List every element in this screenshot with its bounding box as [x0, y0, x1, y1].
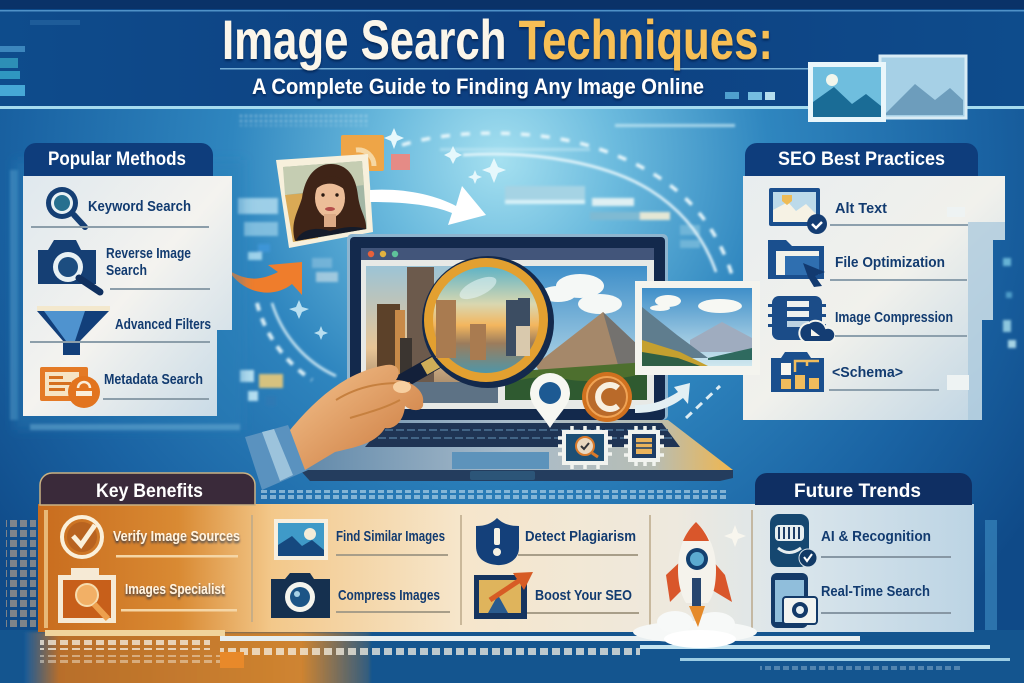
benefit: images specialist: [58, 568, 237, 623]
dividers: [252, 510, 752, 628]
practice: alt text: Alt Text: [835, 200, 887, 217]
benefit: images specialist: Images Specialist: [125, 581, 225, 598]
icon: memory chip: [624, 426, 664, 466]
practice: image compression: [768, 296, 967, 342]
method: keyword search: Keyword Search: [88, 198, 191, 215]
icon: location pin: [530, 373, 570, 428]
icon: copyright badge: [582, 372, 632, 422]
panel: popular methods: [14, 143, 244, 430]
method: metadata search: Metadata Search: [104, 371, 203, 388]
panel heading: future trends: [755, 473, 972, 505]
benefit: find similar images: [274, 519, 448, 560]
benefit: compress images: [271, 573, 450, 618]
panel: seo best practices: [743, 143, 1005, 420]
title band: [0, 0, 1024, 109]
method: keyword search: [31, 187, 209, 228]
screen image: mountain: [505, 266, 660, 400]
icon: search chip: [558, 426, 612, 469]
benefit: find similar images: Find Similar Images: [336, 528, 445, 545]
panel heading: popular methods: Popular Methods: [48, 149, 186, 170]
arrow: card to copyright: [635, 383, 720, 418]
panel heading: future trends: Future Trends: [794, 481, 921, 502]
sleeve: [245, 425, 308, 490]
benefit: detect plagiarism: [476, 518, 638, 565]
arrow: orange curved: [228, 262, 302, 295]
panel heading: seo best practices: SEO Best Practices: [778, 149, 945, 170]
photo of woman: [276, 154, 373, 248]
image card: landscape: [635, 281, 760, 375]
benefit: verify image sources: [62, 517, 240, 558]
title: Image Search Techniques:: [222, 8, 773, 71]
panel heading: seo best practices: [745, 143, 978, 176]
icon: rocket: [633, 522, 757, 648]
icon: pink tile: [391, 154, 410, 170]
panel heading: popular methods: [24, 143, 213, 176]
trend: real-time search: [771, 573, 951, 628]
panel heading: key benefits: Key Benefits: [96, 481, 203, 502]
laptop screen: [347, 234, 668, 420]
method: reverse image search: [38, 240, 210, 292]
icon: top-right image thumbnails: [808, 56, 966, 122]
practice: schema: [771, 352, 939, 392]
panel heading: key benefits: [40, 473, 255, 505]
panel: benefits and trends band: [6, 473, 1010, 670]
practice: schema: <Schema>: [832, 364, 903, 381]
practice: alt text: [769, 188, 968, 234]
method: advanced filters: [30, 306, 211, 355]
hand holding magnifier: [245, 256, 554, 490]
trend: ai and recognition: AI & Recognition: [821, 528, 931, 545]
magnifying glass: [362, 256, 554, 404]
icon: sparkle stars: [289, 128, 506, 340]
benefit: detect plagiarism: Detect Plagiarism: [525, 528, 636, 545]
method: reverse image search: Reverse Image: [106, 245, 191, 262]
hand: [290, 365, 423, 470]
benefit: compress images: Compress Images: [338, 587, 440, 604]
benefit: boost your seo: [474, 572, 639, 619]
method: advanced filters: Advanced Filters: [115, 316, 211, 333]
practice: image compression: Image Compression: [835, 309, 953, 326]
icon: orange rss tile: [341, 135, 384, 171]
subtitle: A Complete Guide to Finding Any Image Online: [252, 74, 704, 99]
benefit: verify image sources: Verify Image Sources: [113, 528, 240, 545]
method: metadata search: [40, 367, 209, 408]
laptop base: [290, 420, 733, 481]
decorative dashed arcs: [257, 133, 732, 380]
practice: file optimization: [768, 240, 967, 287]
arrow: white curved: [370, 186, 486, 225]
method: reverse image search: Search: [106, 262, 147, 279]
practice: file optimization: File Optimization: [835, 254, 945, 271]
screen image: city: [366, 266, 498, 403]
benefit: boost your seo: Boost Your SEO: [535, 587, 632, 604]
laptop: [290, 234, 733, 481]
trend: real-time search: Real-Time Search: [821, 583, 930, 600]
trend: ai and recognition: [770, 514, 951, 567]
